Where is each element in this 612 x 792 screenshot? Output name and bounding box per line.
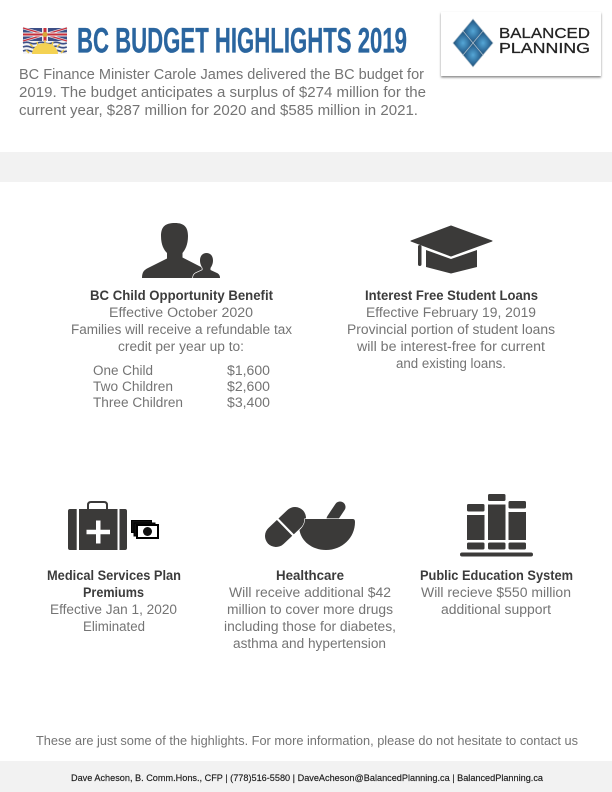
heading: Medical Services Plan: [47, 568, 181, 583]
description: [347, 305, 555, 371]
description: [50, 602, 177, 634]
heading: Interest Free Student Loans: [365, 288, 538, 303]
panel: public education: [420, 494, 573, 617]
description: asthma and hypertension: [233, 636, 386, 651]
description: million to cover more drugs: [227, 602, 393, 617]
description: [71, 305, 292, 354]
description: additional support: [441, 602, 551, 617]
description: [421, 585, 571, 617]
credit table: $2,600: [227, 379, 270, 394]
icon: logo diamond: [453, 19, 493, 67]
description: Will recieve $550 million: [421, 585, 571, 600]
logo: BALANCED: [499, 26, 590, 42]
heading: Public Education System: [420, 568, 573, 583]
icon: medical case: [68, 502, 127, 550]
footer band: [0, 761, 612, 792]
gray band: [0, 152, 612, 182]
icon: graduation cap: [411, 226, 492, 274]
panel: healthcare: [224, 507, 396, 651]
description: credit per year up to:: [118, 339, 244, 354]
icon: money: [132, 520, 158, 538]
intro text: [19, 67, 426, 119]
description: [224, 585, 396, 651]
description: Effective February 19, 2019: [366, 305, 536, 320]
heading: Premiums: [83, 585, 144, 600]
description: Effective October 2020: [109, 305, 253, 320]
intro text: current year, $287 million for 2020 and $585 million in 2021.: [19, 103, 418, 119]
logo: PLANNING: [499, 41, 590, 57]
title: BC BUDGET HIGHLIGHTS 2019: [77, 22, 407, 60]
description: will be interest-free for current: [356, 339, 545, 354]
icon: mortar, pestle and pill: [276, 507, 355, 550]
closing note: These are just some of the highlights. For more information, please do not hesitate to contact us: [36, 734, 578, 748]
credit table: Three Children: [93, 395, 183, 410]
panel: child benefit: [71, 223, 292, 410]
credit table: Two Children: [93, 379, 173, 394]
icon: parent and child: [142, 223, 220, 278]
heading: [47, 568, 181, 600]
credit table: One Child: [93, 363, 153, 378]
description: Families will receive a refundable tax: [71, 322, 292, 337]
heading: Healthcare: [276, 568, 344, 583]
credit table: $3,400: [227, 395, 270, 410]
description: Effective Jan 1, 2020: [50, 602, 177, 617]
credit table: $1,600: [227, 363, 270, 378]
description: Provincial portion of student loans: [347, 322, 555, 337]
heading: BC Child Opportunity Benefit: [90, 288, 273, 303]
intro text: 2019. The budget anticipates a surplus of $274 million for the: [19, 85, 426, 101]
description: and existing loans.: [396, 356, 506, 371]
description: including those for diabetes,: [224, 619, 396, 634]
logo: [441, 12, 601, 76]
icon: BC flag: [23, 28, 67, 54]
panel: student loans: [347, 226, 555, 371]
panel: medical premiums: [47, 502, 181, 634]
description: Will receive additional $42: [229, 585, 391, 600]
description: Eliminated: [83, 619, 145, 634]
contact details: Dave Acheson, B. Comm.Hons., CFP | (778)516-5580 | DaveAcheson@BalancedPlanning.ca | BalancedPlanning.ca: [71, 773, 544, 784]
credit table: [93, 363, 270, 410]
intro text: BC Finance Minister Carole James delivered the BC budget for: [19, 67, 424, 83]
icon: books: [460, 494, 533, 556]
